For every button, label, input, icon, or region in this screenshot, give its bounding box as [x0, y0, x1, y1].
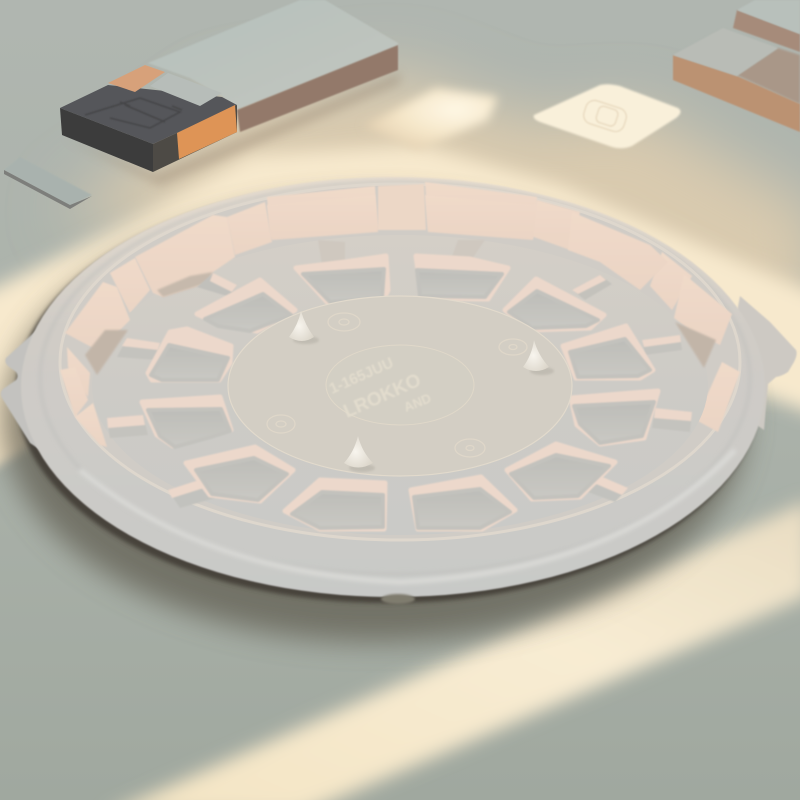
wall shadow right — [675, 322, 716, 368]
pocket 12 — [411, 477, 515, 529]
pocket 11 — [285, 480, 385, 529]
upper block top — [737, 0, 800, 34]
light patch right with logo — [534, 84, 681, 148]
shadow below box — [62, 72, 400, 186]
right tab — [720, 296, 797, 430]
centre label oval — [326, 345, 474, 425]
centre disc — [228, 296, 572, 476]
icon: cone spike bottom — [344, 436, 375, 472]
orange sleeve label — [108, 65, 165, 92]
lower light beam — [105, 500, 800, 800]
dark module — [60, 85, 237, 144]
pocket 7 — [142, 397, 231, 447]
pocket 2 — [416, 256, 508, 299]
lower rim highlight — [80, 450, 735, 582]
radial ribs — [107, 240, 692, 508]
device box top left — [60, 0, 400, 186]
pocket floor — [92, 235, 708, 535]
plate — [1, 177, 797, 604]
pocket 10 — [507, 444, 615, 499]
gray sleeve label — [150, 73, 222, 106]
embossed label text: AND — [402, 390, 433, 415]
icon: embossed logo — [581, 98, 629, 134]
upper light beam — [0, 145, 800, 470]
icon: cone spike right — [523, 340, 554, 375]
lower block shaded side — [737, 48, 800, 104]
pocket 5 — [148, 329, 231, 380]
pocket 8 — [571, 391, 658, 444]
wall panels over floor — [65, 195, 732, 350]
embossed label text: LROKKO — [340, 370, 424, 423]
left light spill — [0, 370, 60, 470]
box side — [237, 45, 398, 132]
wall shadow left — [85, 330, 128, 375]
upper block side — [733, 10, 800, 52]
wall panels — [60, 182, 740, 447]
lower block front side — [673, 55, 800, 132]
small circular marks — [267, 313, 527, 457]
icon: cone spike left — [289, 311, 319, 344]
pockets — [142, 256, 658, 529]
embossed label text — [327, 354, 433, 423]
blocks top right — [673, 0, 800, 132]
plate shadow — [3, 198, 747, 642]
orange block — [177, 105, 237, 159]
light patch left — [364, 88, 498, 150]
pocket 1 — [296, 256, 388, 303]
lower block top — [673, 28, 778, 76]
pocket 6 — [563, 326, 653, 378]
inner lip — [60, 184, 740, 540]
left tab — [1, 300, 80, 470]
plate contact shadow — [16, 183, 760, 603]
small bar left — [4, 157, 92, 209]
rim ring — [40, 182, 750, 574]
pocket 9 — [186, 447, 293, 501]
box top — [148, 0, 398, 110]
wall shadow upper left — [157, 272, 213, 297]
embossed label text: 1-165JUU — [327, 354, 396, 398]
module circuit details — [85, 98, 182, 128]
bottom notch — [381, 594, 415, 604]
outer rim — [21, 177, 765, 597]
pocket 4 — [505, 279, 604, 330]
warm ambient glow — [60, 70, 800, 350]
pocket 3 — [197, 280, 295, 331]
